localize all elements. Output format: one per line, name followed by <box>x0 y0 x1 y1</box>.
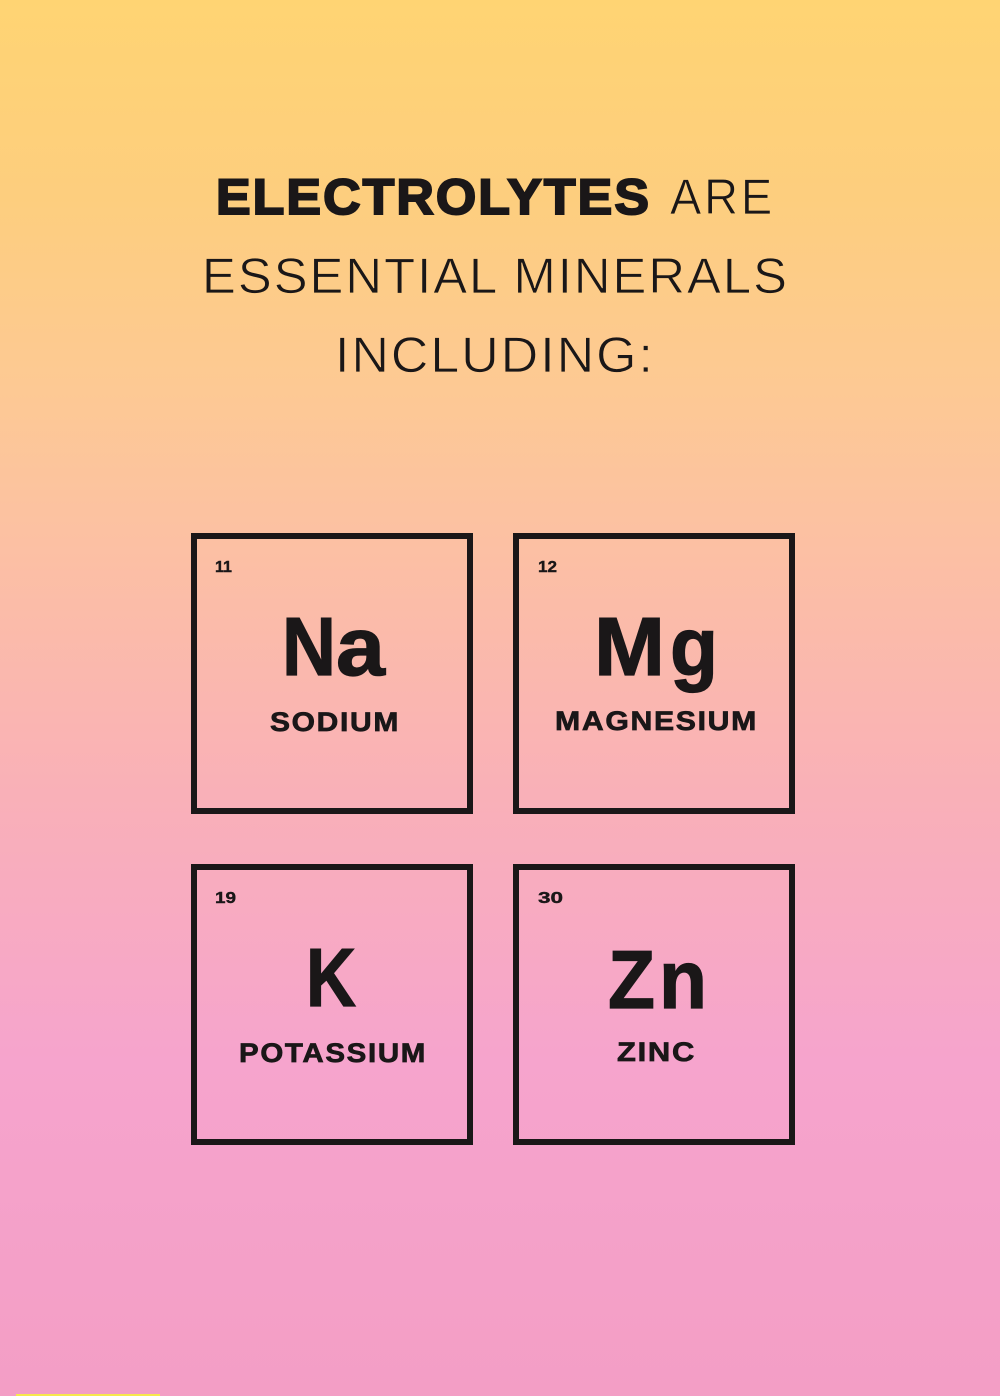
symbol Zn: Z <box>608 933 655 1026</box>
symbol Mg: M <box>594 600 665 693</box>
symbol Na: N <box>282 600 336 693</box>
symbol Zn <box>608 933 707 1026</box>
name potassium: POTASSIUM <box>239 1038 427 1068</box>
name sodium: SODIUM <box>270 707 400 737</box>
title: ELECTROLYTES <box>216 169 651 225</box>
bottom yellow edge strip <box>16 1394 160 1396</box>
symbol K: K <box>306 931 356 1024</box>
atomic number 11: 11 <box>215 559 232 576</box>
name zinc: ZINC <box>617 1037 696 1067</box>
panel: potassium <box>194 867 470 1142</box>
name magnesium: MAGNESIUM <box>555 706 758 736</box>
symbol Na <box>282 600 386 693</box>
panel: zinc <box>516 867 792 1142</box>
title <box>202 169 789 383</box>
panel: sodium <box>194 536 470 811</box>
panel: magnesium <box>516 536 792 811</box>
atomic number 30: 30 <box>538 890 563 907</box>
symbol Mg: g <box>670 600 718 693</box>
symbol Na: a <box>336 600 386 693</box>
symbol Zn: n <box>659 933 707 1026</box>
atomic number 12: 12 <box>538 559 557 576</box>
atomic number 19: 19 <box>215 890 236 907</box>
title: ESSENTIAL MINERALS <box>202 248 789 304</box>
title: ARE <box>670 169 775 225</box>
symbol Mg <box>594 600 718 693</box>
title: INCLUDING: <box>335 327 655 383</box>
